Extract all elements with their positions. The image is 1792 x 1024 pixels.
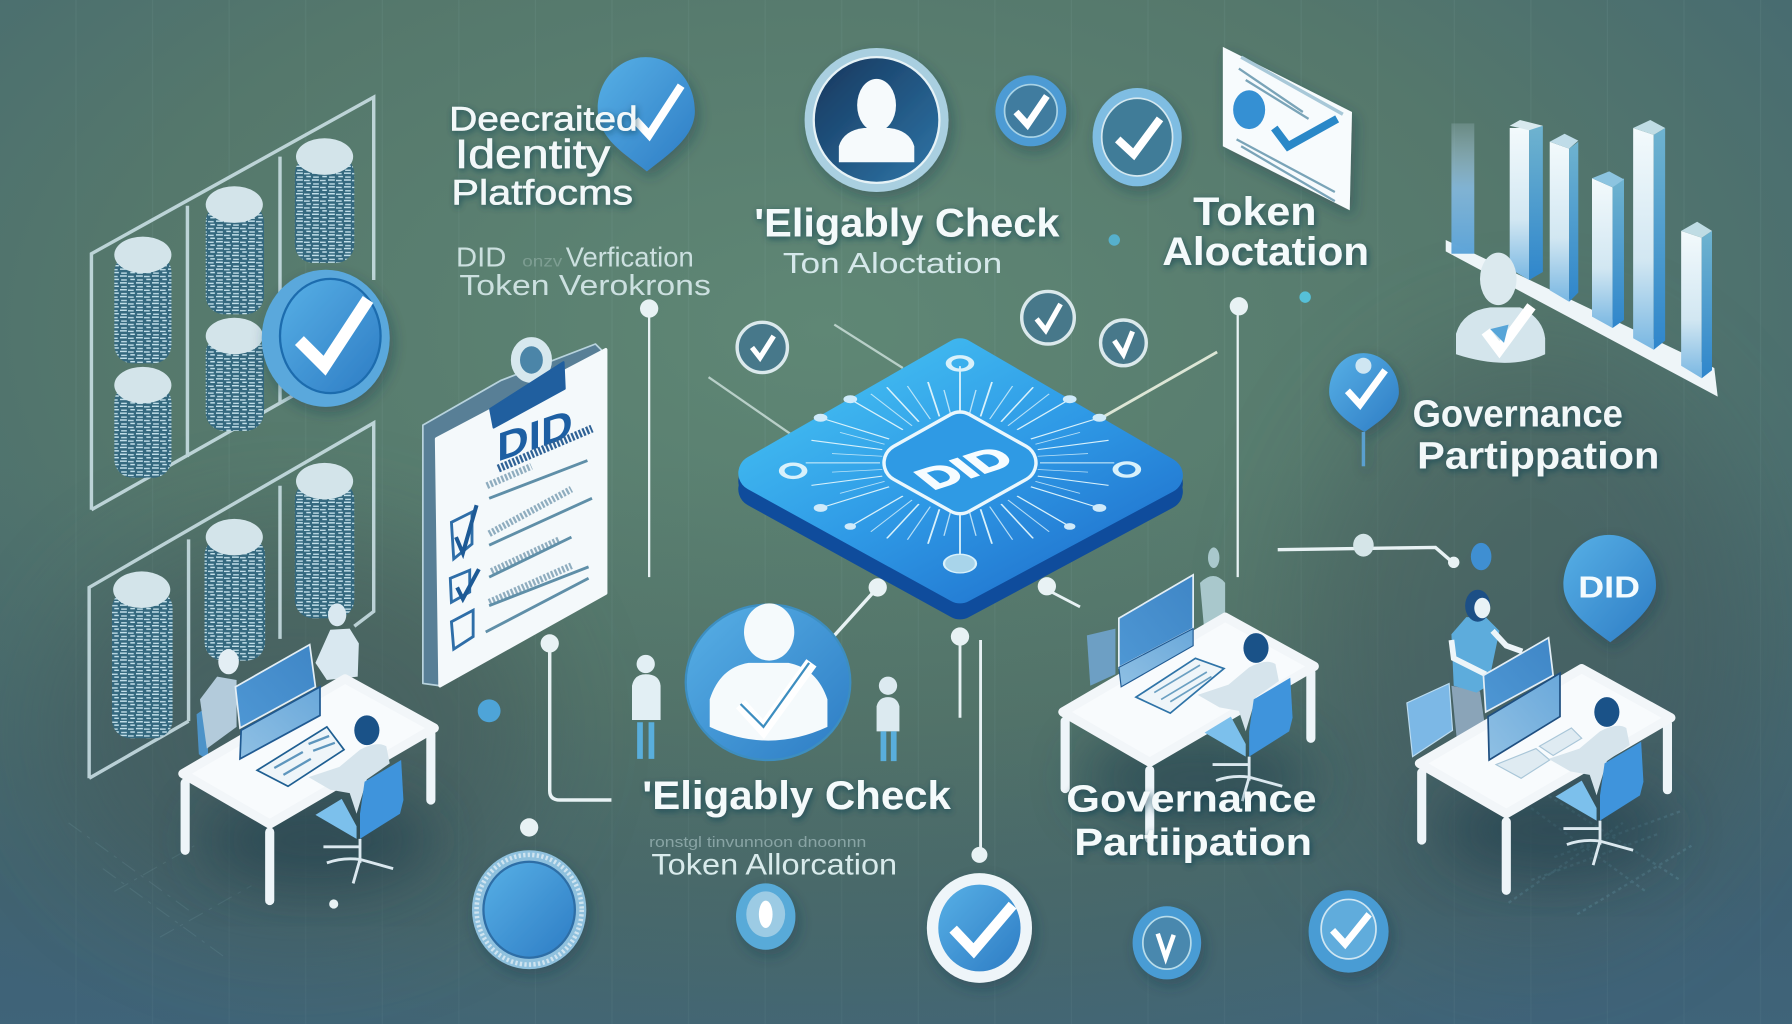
paper on desk <box>257 727 344 786</box>
connector node <box>640 299 658 318</box>
connector: upper right vertical <box>1237 309 1239 577</box>
desk top and legs <box>183 679 434 901</box>
subtext: token allocation: Ton Aloctation <box>783 248 1002 280</box>
central DID chip <box>757 357 1165 601</box>
clip <box>490 342 565 427</box>
icon: coin badge <box>472 850 586 969</box>
clipboard <box>423 342 606 686</box>
heading: governance upper: Governance <box>1413 392 1623 434</box>
rack frame <box>89 423 374 778</box>
icon: large check badge lower <box>927 873 1032 983</box>
icon: small coin badge <box>736 883 795 950</box>
connector: chip to upper left <box>709 325 903 437</box>
disc <box>686 605 850 760</box>
clipboard title: DID <box>497 400 573 470</box>
connector: central drop <box>960 592 1080 848</box>
icon: DID pin: DID <box>1578 570 1640 605</box>
connector: chip to lower avatar <box>825 587 878 646</box>
chip core <box>903 431 1017 495</box>
connector node <box>869 578 887 597</box>
seated user <box>1549 697 1643 865</box>
monitor lower <box>1119 629 1193 687</box>
lower avatar badge <box>686 603 850 760</box>
heading: eligibility lower: 'Eligably Check <box>642 774 952 818</box>
keyboard and paper <box>1496 728 1582 778</box>
chip side <box>757 365 1165 601</box>
bar chart <box>1446 120 1718 397</box>
subtext lower faint: ronstgl tinvunnoon dnoonnn <box>649 835 866 851</box>
rear chair <box>197 706 208 760</box>
paper on desk <box>1136 658 1224 713</box>
seated user <box>309 715 403 883</box>
subtext: did verification: Verfication <box>566 241 694 272</box>
board back <box>423 344 606 686</box>
background dark pool left <box>57 537 537 926</box>
sheet <box>437 350 606 686</box>
person <box>710 603 827 741</box>
seated head <box>218 649 239 674</box>
accent dots <box>478 234 1491 722</box>
icon: check badge small <box>995 75 1066 146</box>
floor texture left <box>69 823 251 960</box>
rear monitor <box>235 645 315 728</box>
connector node <box>1353 534 1374 557</box>
icon: person with check <box>1456 253 1545 363</box>
heading: platforms: Platfocms <box>451 173 633 213</box>
chart base <box>1446 240 1718 397</box>
connector nodes <box>329 577 1056 909</box>
coin stacks <box>112 463 354 738</box>
seated person behind screen <box>200 677 237 749</box>
heading: token allocation <box>1162 190 1369 274</box>
panel: lower server rack <box>89 423 374 778</box>
desk with two people, left <box>183 603 434 901</box>
connector: L shaped <box>550 651 611 800</box>
standing person <box>315 603 359 680</box>
rear chair <box>1407 683 1453 757</box>
heading: governance lower: Governance <box>1066 777 1317 819</box>
desk top and legs <box>1419 669 1671 890</box>
heading: platforms <box>449 100 638 213</box>
icon: v badge <box>1133 906 1201 979</box>
connector: upper left vertical <box>648 311 650 577</box>
subtext: did verification: DID <box>456 241 506 272</box>
chip top <box>757 357 1165 585</box>
monitor upper <box>1483 638 1553 712</box>
heading: governance upper <box>1413 392 1659 477</box>
heading: governance upper: Partippation <box>1417 435 1659 477</box>
desk with standing person, right <box>1407 590 1671 890</box>
ring check marks <box>752 304 1133 358</box>
chip core label: DID <box>904 440 1024 496</box>
connector node <box>1230 297 1248 315</box>
standing person <box>1200 547 1225 634</box>
checklist <box>450 429 592 649</box>
panel: upper server rack <box>91 97 374 510</box>
heading: governance lower: Partiipation <box>1074 821 1312 863</box>
heading: token allocation: Aloctation <box>1162 230 1369 274</box>
connector: right horizontal <box>1278 547 1453 562</box>
heading: token allocation: Token <box>1193 190 1317 234</box>
coin stacks <box>114 138 354 478</box>
standing person <box>1451 590 1522 754</box>
heading: eligibility: 'Eligably Check <box>754 202 1060 246</box>
icon: avatar badge <box>805 48 949 192</box>
subtext: did verification: onzv <box>522 253 562 270</box>
heading pin: check <box>598 57 695 171</box>
icon: check badge lower right <box>1309 890 1389 973</box>
monitor upper <box>1119 575 1193 667</box>
heading: governance lower <box>1066 777 1317 863</box>
heading: platforms: Deecraited <box>449 100 638 138</box>
icon: token document <box>1223 47 1352 210</box>
bars <box>1451 120 1712 378</box>
icon: governance pin <box>1329 353 1399 466</box>
icon: large check badge <box>262 270 390 407</box>
icon: DID pin <box>1563 535 1656 642</box>
check inner stroke <box>741 663 809 727</box>
rack frame <box>91 97 374 510</box>
icon: small person right <box>877 677 899 761</box>
front monitor <box>240 687 320 759</box>
subtext: token allocation lower: Token Allorcation <box>651 848 897 881</box>
rear chair <box>1087 629 1115 686</box>
desk top and legs <box>1063 617 1314 839</box>
subtext: did verification <box>456 241 711 302</box>
subtext: did verification: Token Verokrons <box>459 270 711 302</box>
floor texture right <box>1509 789 1691 914</box>
icon: small check rings <box>737 291 1146 373</box>
icon: check badge medium <box>1093 88 1182 186</box>
heading: platforms: Identity <box>455 131 611 177</box>
desk with person, centre <box>1063 547 1314 839</box>
connector: chip to upper right <box>1103 352 1217 417</box>
seated user <box>1198 633 1293 801</box>
connector node <box>541 634 559 653</box>
background dark pool right <box>1303 343 1760 937</box>
check <box>741 663 811 729</box>
monitor lower <box>1488 673 1560 760</box>
circuit traces <box>782 357 1138 573</box>
icon: small person left <box>632 655 661 759</box>
